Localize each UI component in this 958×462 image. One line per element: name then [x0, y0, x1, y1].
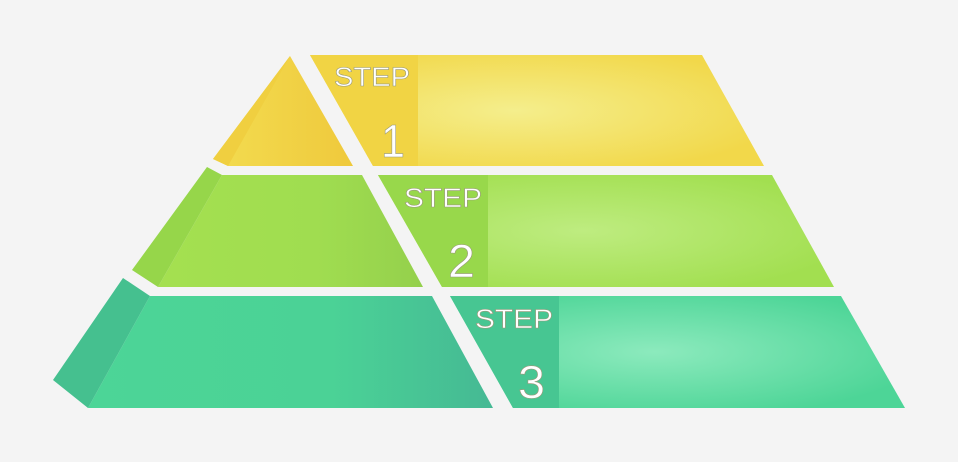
label: STEP 1: 1 — [381, 115, 405, 167]
label: STEP 1: STEP — [334, 62, 410, 92]
tier 1 left: triangle — [213, 56, 353, 166]
label: STEP 3 — [475, 304, 553, 408]
tier 1 right: step 1 panel — [310, 55, 764, 167]
tier 3 left — [53, 278, 493, 408]
label: STEP 1 — [334, 62, 410, 167]
tier 3 right: step 3 panel — [450, 296, 905, 408]
tier 2 right: step 2 panel — [378, 175, 834, 287]
label: STEP 2: 2 — [448, 235, 475, 287]
label: STEP 2: STEP — [404, 183, 482, 213]
label: STEP 2 — [404, 183, 482, 287]
tier 2 left — [132, 167, 423, 287]
label: STEP 3: 3 — [518, 356, 545, 408]
label: STEP 3: STEP — [475, 304, 553, 334]
